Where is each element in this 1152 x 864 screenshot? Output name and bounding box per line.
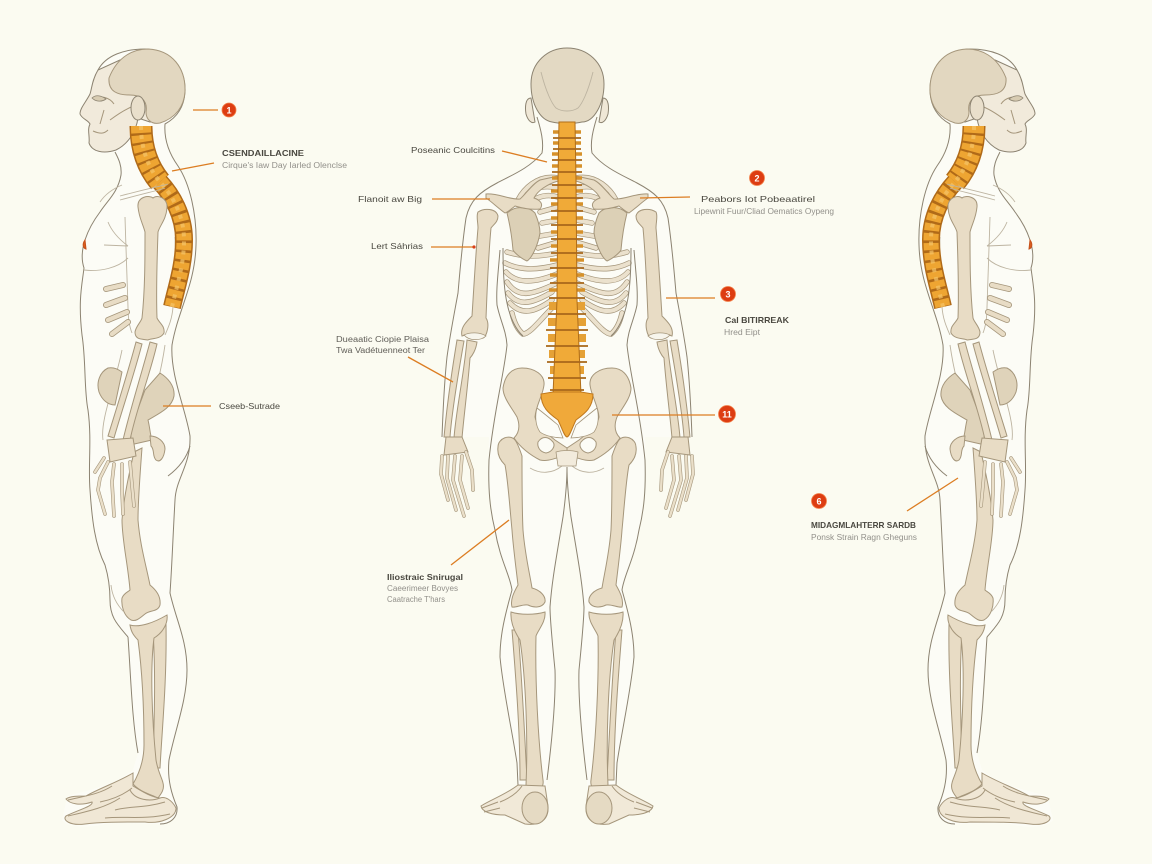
side spine [141, 126, 184, 307]
callout 3 [666, 286, 790, 337]
sacrum [541, 392, 593, 437]
figure: left side view skeleton [62, 49, 196, 827]
back ribs [503, 177, 558, 336]
ilium and pubis [503, 368, 567, 461]
back view right half (mirrored) [567, 98, 693, 824]
figure: right side view skeleton (mirrored) [919, 49, 1053, 827]
callout 11 [612, 406, 736, 422]
back body outline [442, 117, 567, 785]
label: cervical spine [172, 148, 348, 171]
side forearm [108, 342, 157, 440]
side ribs [83, 184, 168, 334]
back femur [498, 437, 545, 607]
back humerus [462, 209, 498, 338]
label: pelvis side [163, 401, 280, 411]
label: neck [411, 145, 547, 162]
callout 6 [811, 478, 958, 542]
label: upper arm left: Lert Sáhrias [371, 241, 423, 251]
side tibia [130, 615, 167, 798]
buttock crease [530, 466, 562, 472]
body outline [80, 49, 196, 824]
scapula [507, 208, 540, 261]
label: forearm [336, 335, 453, 382]
side femur [122, 448, 160, 621]
callout 1: 1 [226, 106, 232, 116]
side fibula [153, 624, 166, 768]
label: forearm: Twa Vadétuenneot Ter [336, 346, 425, 355]
side patella [111, 585, 124, 612]
back forearm [444, 340, 477, 438]
back foot [481, 785, 548, 824]
skull [80, 49, 185, 152]
callout 1 [193, 103, 236, 117]
back spine column [546, 122, 588, 395]
callout 3: Hred Eipt [724, 328, 761, 337]
side pelvis [98, 368, 190, 476]
pubic symphysis [556, 450, 578, 466]
ear [526, 98, 535, 123]
callout 2: Lipewnit Fuur/Cliad Oematics Oypeng [694, 207, 834, 216]
label: cervical spine: CSENDAILLACINE [222, 148, 304, 158]
label: forearm: Dueaatic Ciopie Plaisa [336, 335, 430, 344]
callout 3: 3 [725, 290, 731, 300]
label: pelvis side: Cseeb-Sutrade [219, 401, 280, 411]
label: neck: Poseanic Coulcitins [411, 145, 495, 155]
callout 3: Cal BITIRREAK [725, 315, 790, 325]
callout 6: Ponsk Strain Ragn Gheguns [811, 533, 917, 542]
figure: center back view skeleton [441, 48, 693, 824]
label: femur: Caeerimeer Bovyes [387, 584, 458, 593]
label: femur: Iliostraic Snirugal [387, 572, 463, 582]
label: femur [387, 520, 509, 604]
obturator foramen [538, 438, 554, 453]
side hand [95, 438, 136, 516]
back tibia and fibula [511, 612, 545, 791]
back body silhouette [442, 117, 567, 790]
callout 2: Peabors Iot Pobeaatirel [701, 194, 815, 204]
body silhouette [62, 49, 196, 827]
callout 2: 2 [754, 174, 760, 184]
callout 6: MIDAGMLAHTERR SARDB [811, 520, 916, 530]
back view left half [441, 98, 567, 824]
side humerus [135, 196, 167, 340]
callout 11: 11 [722, 410, 732, 420]
label: cervical spine: Cirque's Iaw Day Iarled Olenclse [222, 161, 348, 170]
side foot bones [65, 773, 176, 824]
back skull [531, 48, 604, 124]
pelvic opening [536, 408, 563, 438]
callout 2 [640, 170, 834, 216]
arm outline [103, 217, 175, 440]
label: femur: Caatrache T'hars [387, 595, 445, 604]
label: clavicle left: Flanoit aw Big [358, 194, 422, 204]
callout 6: 6 [816, 496, 822, 506]
label: clavicle left [358, 194, 490, 204]
label: upper arm left [371, 241, 476, 251]
clavicle [486, 176, 558, 213]
back hand [441, 437, 473, 516]
